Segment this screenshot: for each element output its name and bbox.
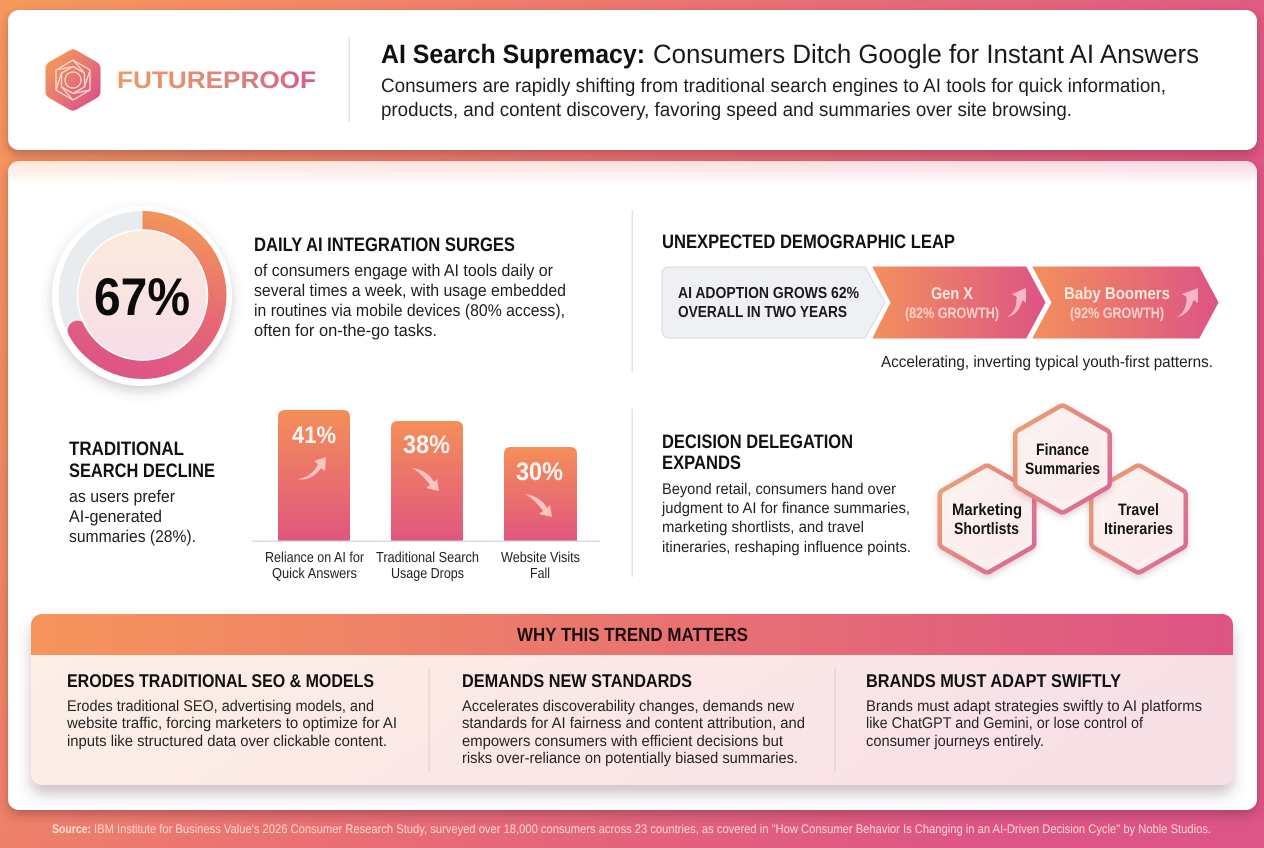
column: demands new standards: Accelerates discoverability changes, demands new: [462, 698, 795, 715]
column: demands new standards: empowers consumers with efficient decisions but: [462, 733, 784, 750]
column: brands must adapt: like ChatGPT and Gemini, or lose control of: [866, 715, 1144, 732]
column: demands new standards: risks over-reliance on potentially biased summaries.: [462, 750, 798, 767]
column: brands must adapt: Brands must adapt strategies swiftly to AI platforms: [866, 698, 1202, 715]
logo wordmark: FUTUREPROOF: [117, 67, 316, 94]
chevron: Gen X: Gen X: [931, 284, 974, 303]
bar: 30%: 30%: [516, 458, 563, 486]
text block: decision delegation: Beyond retail, consumers hand over: [662, 481, 896, 498]
hexagon cluster: [946, 412, 1180, 566]
text block: daily AI integration: in routines via mobile devices (80% access),: [254, 301, 565, 320]
chevron: Gen X: (82% GROWTH): [905, 305, 999, 322]
bar chart: search decline: [252, 410, 600, 582]
text block: traditional search decline: SEARCH DECLINE: [69, 460, 215, 482]
title: Consumers Ditch Google for Instant AI Answers: [653, 39, 1199, 69]
panel: header: [8, 10, 1257, 150]
text block: traditional search decline: TRADITIONAL: [69, 438, 184, 460]
text block: decision delegation: judgment to AI for finance summaries,: [661, 500, 910, 517]
chevron: Gen X: [873, 267, 1045, 338]
text block: daily AI integration: of consumers engage with AI tools daily or: [254, 261, 553, 280]
bar labels: Website Visits: [501, 550, 580, 566]
hexagon: travel itineraries: Travel: [1118, 501, 1159, 519]
bar labels: Fall: [530, 566, 550, 582]
chevron: Baby Boomers: (92% GROWTH): [1070, 305, 1164, 322]
hexagon: marketing shortlists: Marketing: [952, 501, 1022, 519]
bar: 38%: 38%: [403, 431, 450, 459]
chevron: overall adoption: OVERALL IN TWO YEARS: [678, 304, 847, 321]
text block: decision delegation: EXPANDS: [662, 452, 741, 474]
bar: 38%: [391, 421, 463, 541]
text block: decision delegation: [661, 431, 911, 556]
bar labels: Reliance on AI for: [265, 550, 364, 566]
donut arc: [68, 221, 216, 369]
title: AI Search Supremacy:: [381, 39, 645, 69]
subtitle: [381, 75, 1166, 121]
hexagon: marketing shortlists: Shortlists: [954, 520, 1019, 538]
text block: traditional search decline: summaries (28%).: [69, 527, 196, 546]
chevron: Baby Boomers: [1033, 267, 1218, 338]
text block: daily AI integration: often for on-the-go tasks.: [254, 321, 437, 340]
text block: decision delegation: DECISION DELEGATION: [662, 431, 853, 453]
text block: daily AI integration: DAILY AI INTEGRATION SURGES: [254, 234, 515, 256]
column: demands new standards: standards for AI fairness and content attribution, and: [462, 715, 805, 732]
text block: traditional search decline: [69, 438, 215, 546]
bar labels: Traditional Search: [376, 550, 479, 566]
bar: 30%: [504, 447, 577, 541]
column: brands must adapt: [866, 670, 1202, 750]
caption: demographic leap: Accelerating, inverting typical youth-first patterns.: [881, 354, 1213, 371]
bar labels: Usage Drops: [391, 566, 464, 582]
column: demands new standards: [462, 670, 805, 767]
panel: why this trend matters: [31, 614, 1233, 785]
donut value: 67%: [94, 268, 190, 327]
hexagon: finance summaries: [1021, 412, 1104, 506]
text block: daily AI integration: [254, 234, 566, 340]
column: erodes traditional SEO: [66, 670, 397, 750]
chevron: overall adoption: AI ADOPTION GROWS 62%: [678, 285, 859, 302]
icon: up arrow: [1177, 288, 1198, 317]
chevron: Baby Boomers: Baby Boomers: [1064, 284, 1170, 303]
column: erodes traditional SEO: Erodes traditional SEO, advertising models, and: [67, 698, 374, 715]
text block: decision delegation: marketing shortlists, and travel: [662, 519, 864, 536]
column: erodes traditional SEO: website traffic, forcing marketers to optimize for AI: [66, 715, 397, 732]
text block: traditional search decline: as users prefer: [69, 487, 175, 506]
title: [381, 39, 1199, 69]
hexagon: travel itineraries: [1097, 472, 1180, 566]
bar: 41%: [278, 410, 350, 541]
chevron: overall adoption: [662, 267, 885, 338]
subtitle: Consumers are rapidly shifting from traditional search engines to AI tools for quick information,: [381, 75, 1166, 97]
heading: demographic leap: UNEXPECTED DEMOGRAPHIC LEAP: [662, 231, 955, 253]
bar labels: [265, 550, 580, 582]
subtitle: products, and content discovery, favoring speed and summaries over site browsing.: [381, 99, 1072, 121]
icon: logo hexagon: [53, 57, 93, 103]
column: erodes traditional SEO: inputs like structured data over clickable content.: [67, 733, 387, 750]
text block: traditional search decline: AI-generated: [69, 507, 162, 526]
why banner: [31, 614, 1233, 655]
column: demands new standards: DEMANDS NEW STANDARDS: [462, 670, 692, 691]
bar: 41%: 41%: [292, 422, 336, 449]
column: erodes traditional SEO: ERODES TRADITIONAL SEO & MODELS: [67, 670, 374, 691]
why banner: WHY THIS TREND MATTERS: [517, 625, 748, 646]
hexagon: finance summaries: Summaries: [1025, 460, 1100, 478]
icon: up arrow: [1007, 288, 1026, 317]
column: brands must adapt: BRANDS MUST ADAPT SWIFTLY: [866, 670, 1122, 691]
text block: daily AI integration: several times a week, with usage embedded: [254, 281, 566, 300]
hexagon: marketing shortlists: [946, 472, 1028, 566]
column: brands must adapt: consumer journeys entirely.: [866, 733, 1044, 750]
panel: main content: [8, 161, 1257, 810]
hexagon: travel itineraries: Itineraries: [1104, 520, 1173, 538]
text block: decision delegation: itineraries, reshaping influence points.: [662, 539, 911, 556]
chart: 67% donut: [52, 206, 232, 386]
bar labels: Quick Answers: [272, 566, 357, 582]
hexagon: finance summaries: Finance: [1036, 441, 1089, 459]
source footer: Source:: [52, 822, 91, 836]
